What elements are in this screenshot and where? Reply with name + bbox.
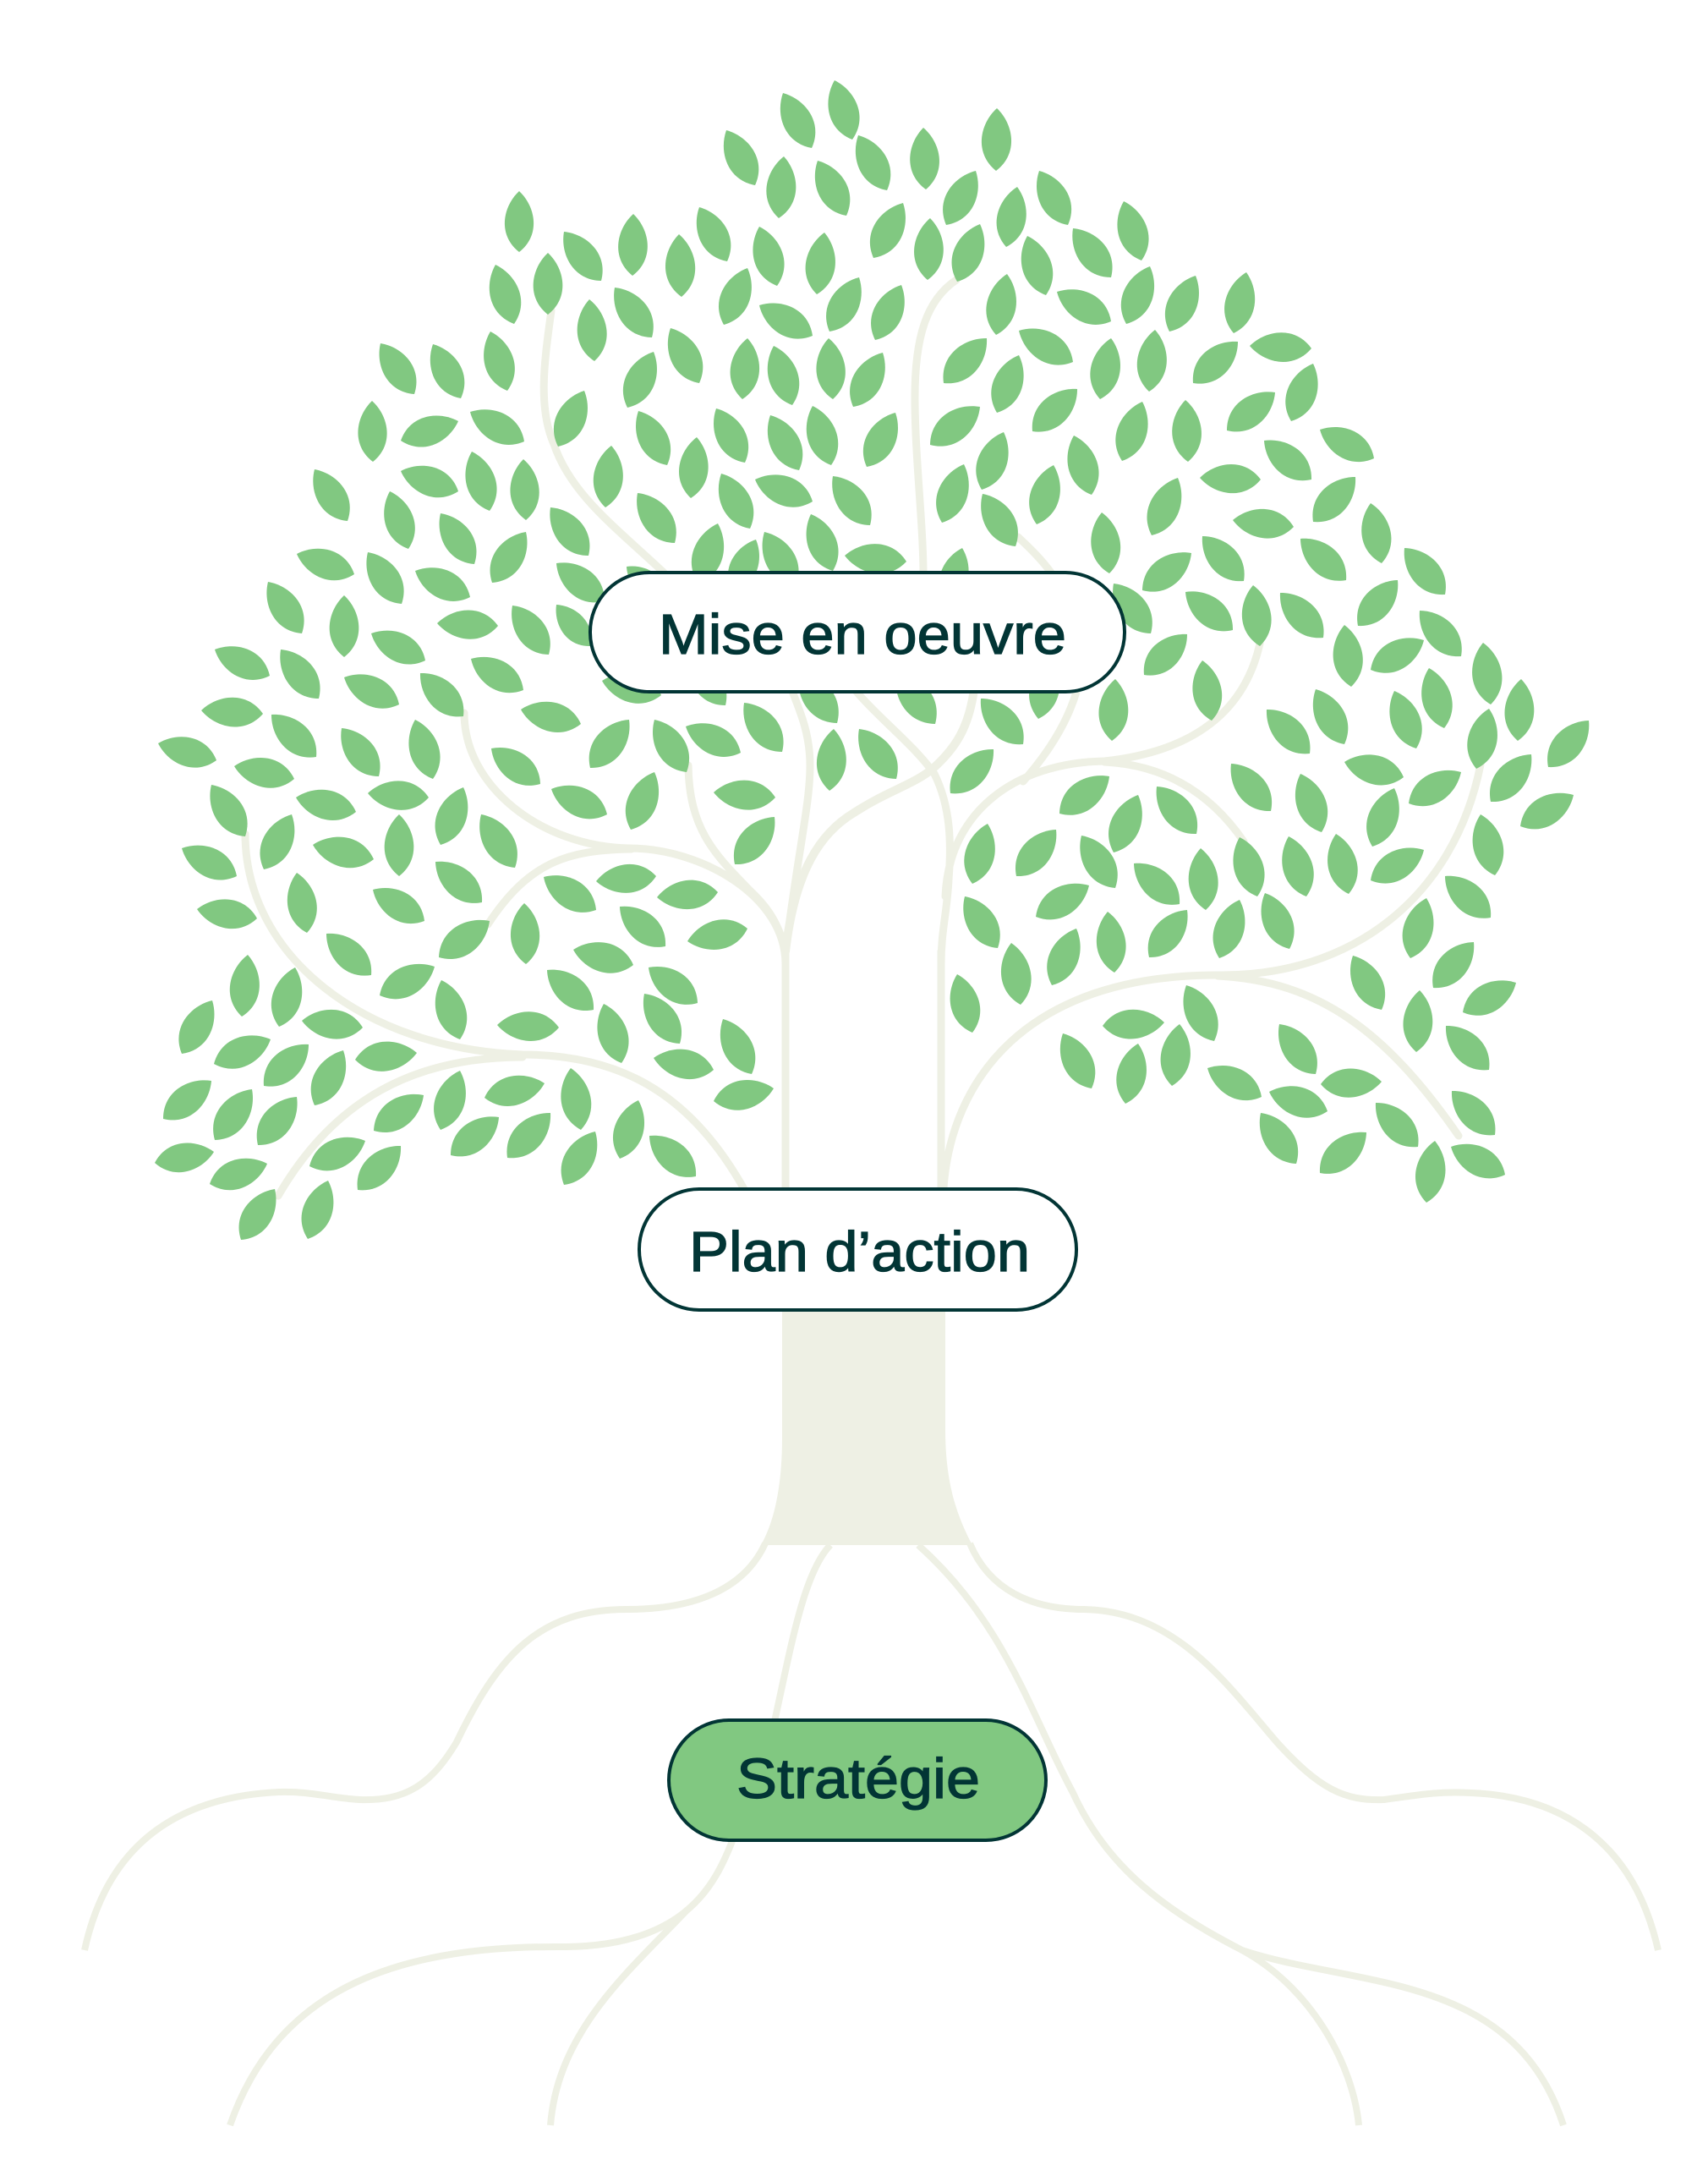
leaves: crown centre [591, 76, 1125, 611]
pill: Stratégie [669, 1720, 1046, 1840]
leaves: lower right [1050, 933, 1523, 1204]
branches [245, 280, 1481, 1196]
pill: Mise en oeuvre: Mise en oeuvre [659, 603, 1066, 666]
tree trunk [761, 1307, 972, 1545]
pill: Mise en oeuvre [590, 573, 1125, 692]
pill: Plan d'action: Plan d’action [689, 1220, 1030, 1284]
pill: Stratégie: Stratégie [736, 1747, 980, 1811]
leaves: upper left [154, 191, 848, 1067]
leaves: around the Mise en oeuvre pill [599, 651, 1065, 803]
leaves: middle right [944, 765, 1509, 1036]
roots [85, 1543, 1658, 2125]
pill: Plan d'action [639, 1189, 1076, 1310]
leaves: upper right [1098, 197, 1600, 852]
leaves: lower left [152, 993, 777, 1247]
